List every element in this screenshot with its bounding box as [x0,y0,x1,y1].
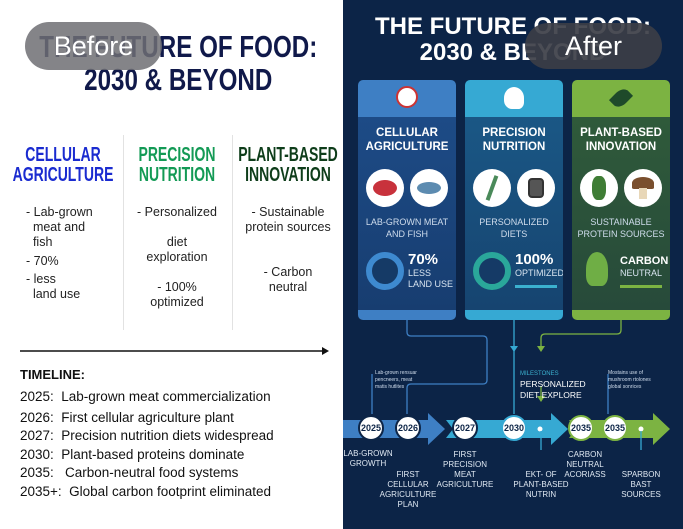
title: after: THE FUTURE OF FOOD: [375,13,651,40]
panel: after: 2030 [504,423,524,433]
card: plant-based innovation: CARBON [620,255,668,267]
text: cellular: - 70% [26,254,59,268]
icon: cells [396,86,418,108]
timeline list: 2026: First cellular agriculture plant [20,410,234,425]
panel: after: FIRST [453,450,477,459]
panel: after: GROWTH [350,459,386,468]
panel: after: NUTRIN [526,490,556,499]
panel: after: ACORIASS [564,470,606,479]
timeline notes: matis hutlites [375,384,404,390]
card: precision nutrition: PERSONALIZED [479,217,549,227]
card: cellular agriculture: AGRICULTURE [366,141,448,153]
panel: after: AGRICULTURE [380,490,436,499]
text: precision: optimized [150,295,204,309]
card: cellular agriculture: AND FISH [386,229,428,239]
text: precision: - 100% [157,280,197,294]
card: plant-based innovation: PROTEIN SOURCES [577,229,664,239]
connectors [371,320,622,414]
panel: after: global sonrices [608,384,641,390]
text: cellular: meat and [33,220,85,234]
panel: after: 2026 [398,423,418,433]
text: precision: diet [167,235,187,249]
panel: before [0,0,343,529]
card: cellular agriculture [358,80,456,320]
text: plant: protein sources [245,220,331,234]
card: plant-based innovation: NEUTRAL [620,268,662,278]
title: after: 2030 & BEYOND [420,39,606,66]
title: before: THE FUTURE OF FOOD: [39,29,317,64]
timeline list: 2035: Carbon-neutral food systems [20,465,238,480]
text: cellular: fish [33,235,52,249]
stat: 100% [473,252,511,290]
icon: head [504,87,524,109]
text: precision: exploration [146,250,208,264]
icon: meat [366,169,404,207]
panel: after: PRECISION [443,460,487,469]
label: before pill [25,22,162,70]
card: cellular agriculture: CELLULAR [376,127,438,139]
text: precision [137,205,217,309]
card: precision nutrition: 100% [515,251,553,268]
card: precision nutrition [465,80,563,320]
label: after pill: After [565,31,622,61]
timeline list: 2025: Lab-grown meat commercialization [20,389,271,404]
label: after pill [525,23,662,69]
timeline arrow [343,413,670,450]
stat: 70% [366,252,404,290]
label: before pill: Before [54,31,133,61]
panel: after: MEAT [454,470,476,479]
title: before: 2030 & BEYOND [84,62,272,97]
timeline list: TIMELINE: [20,367,85,382]
title: after [375,13,651,66]
text: cellular: - less [26,272,56,286]
title: before [39,29,317,97]
arrow: timeline [20,347,329,355]
timeline list: 2030: Plant-based proteins dominate [20,447,244,462]
timeline notes: Lab-grown rensuar [375,370,417,376]
panel: after: 2035 [605,423,625,433]
text: precision: - Personalized [137,205,217,219]
year markers [358,415,384,441]
panel: after: Mostains use of [608,370,643,376]
icon: dna [473,169,511,207]
panel: after: PLANT-BASED [513,480,569,489]
text: cellular [26,205,93,301]
panel: after: SOURCES [621,490,661,499]
heading: cellular agriculture: AGRICULTURE [13,164,113,186]
timeline notes: pencneers, meat [375,377,412,383]
panel: after: FIRST [396,470,420,479]
card: cellular agriculture: LESS [408,268,431,278]
heading: plant-based innovation: PLANT-BASED [238,144,338,166]
heading: precision nutrition: PRECISION [138,144,216,166]
panel: after: AGRICULTURE [437,480,493,489]
panel: after: LAB-GROWN [343,449,393,458]
text: plant: - Sustainable [252,205,324,219]
card: cellular agriculture: LAND USE [408,279,453,289]
panel: after: MILESTONES [520,371,559,377]
panel: after [343,0,683,529]
panel: after: CARBON [568,450,602,459]
heading: cellular agriculture: CELLULAR [25,144,101,166]
heading: precision nutrition: NUTRITION [139,164,215,186]
card: precision nutrition: OPTIMIZED [515,268,563,278]
timeline list [20,367,274,499]
icon: fish [410,169,448,207]
card: plant-based innovation: PLANT-BASED [580,127,662,139]
text: cellular: - Lab-grown [26,205,93,219]
panel: after: 2035 [571,423,591,433]
text: plant: - Carbon [264,265,312,279]
heading: plant-based innovation [238,144,338,186]
panel: after: CELLULAR [387,480,429,489]
icon: leaves [609,86,633,110]
panel: after: BAST [631,480,651,489]
icon: mushroom [624,169,662,207]
panel: after: 2027 [455,423,475,433]
panel: after: DIET EXPLORE [520,390,582,400]
card: cellular agriculture: LAB-GROWN MEAT [366,217,448,227]
timeline list: 2027: Precision nutrition diets widespread [20,428,274,443]
card: precision nutrition: PRECISION [482,127,546,139]
panel: after: PLAN [398,500,418,509]
timeline list: 2035+: Global carbon footprint eliminated [20,484,271,499]
card: precision nutrition: NUTRITION [483,141,545,153]
heading: cellular agriculture [13,144,113,186]
heading: plant-based innovation: INNOVATION [245,164,331,186]
panel: after: EKT- OF [525,470,557,479]
year markers: 2025 [361,423,381,433]
card: precision nutrition: DIETS [501,229,527,239]
card: cellular agriculture: 70% [408,251,438,268]
icon: watch [517,169,555,207]
panel: after: PERSONALIZED [520,379,586,389]
card: plant-based innovation: SUSTAINABLE [590,217,652,227]
icon: seaweed [580,169,618,207]
timeline notes [375,370,417,390]
card: plant-based innovation: INNOVATION [586,141,656,153]
panel: after: SPARBON [622,470,660,479]
icon: sprout [586,252,608,286]
text: cellular: land use [33,287,80,301]
heading: precision nutrition [138,144,216,186]
card: plant-based innovation [572,80,670,320]
text: plant [245,205,331,294]
text: plant: neutral [269,280,307,294]
panel: after: mushroom rtolones [608,377,651,383]
panel: after: NEUTRAL [566,460,604,469]
